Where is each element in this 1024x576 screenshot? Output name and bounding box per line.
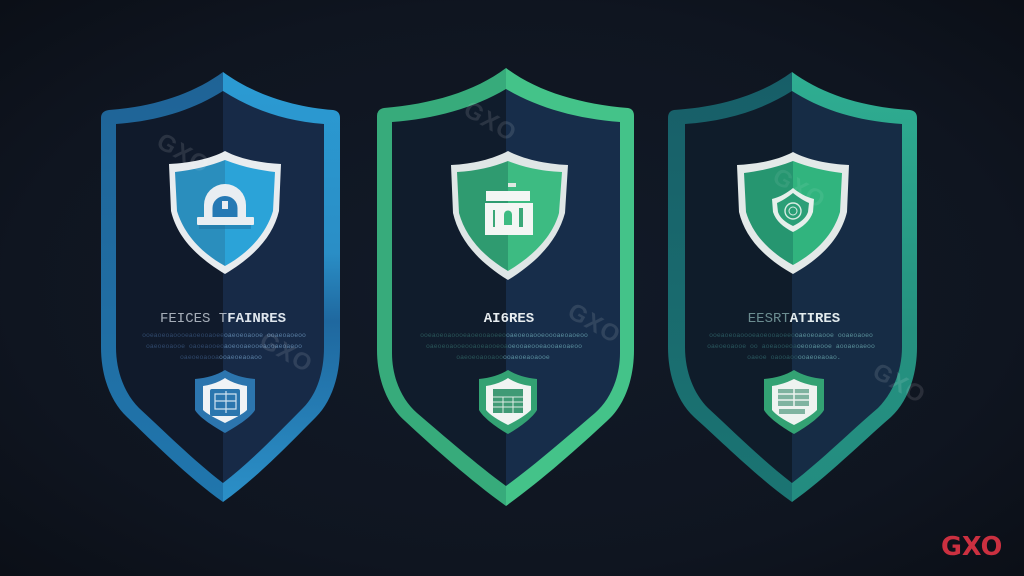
text block: oaeoeoaooe oo aoeaooeoaoeooaeooe aooaeoaeoo [707,343,875,350]
text block: oaeoe oaooaooooaeoeaoao. [747,354,841,361]
watermarks: GXO [768,163,830,214]
shield frame: green [377,68,634,506]
watermarks: GXO [459,96,521,147]
text block: ooeaoeoaoooeaoeooaoeeooaeoeoaooe ooaeoaoeo [709,332,873,339]
text block: oaeoeoaooaooaeoeaoaoo [180,354,262,361]
panel: right teal shield [668,72,917,502]
icon: small green shield with table [479,370,537,434]
watermarks: GXO [255,327,317,378]
heading: EESRTATIRES [748,311,840,327]
text block [420,332,588,361]
panel: left blue shield [101,72,340,502]
heading: FEICES TFAINRES [160,311,286,327]
text block: ooeaoeoaoooeaoeooaoeeooaeoeoaooeoooaeoaoeoo [420,332,588,339]
shield frame: blue [101,72,340,502]
logo: GXO [941,532,1002,562]
text block [142,332,306,361]
text block: oaeoeoaooeooaoeaooeoaoeooaeooeaooaeoaeoo [426,343,582,350]
icon: large blue shield with dome [169,151,281,274]
panel: centre green shield [377,68,634,506]
shield frame: teal [668,72,917,502]
icon: small green shield with document [764,370,824,434]
heading: AI6RES [484,311,534,327]
watermarks: GXO [152,128,214,179]
watermarks [152,96,930,409]
text block: oaeoeoaooe oaoeaooeoaoeooaeooeaooaeoaeoo [146,343,302,350]
watermarks: GXO [868,358,930,409]
text block [707,332,875,361]
text block: oaeoeoaooaooooaeoeaoaooe [456,354,550,361]
icon: large green shield with building [451,151,568,280]
icon: large green shield with emblem [737,152,849,274]
icon: small blue shield with panel [195,370,255,433]
text block: ooeaoeoaoooeaoeooaoeeoaeoeoaooe ooaeoaoeoo [142,332,306,339]
watermarks: GXO [563,298,625,349]
